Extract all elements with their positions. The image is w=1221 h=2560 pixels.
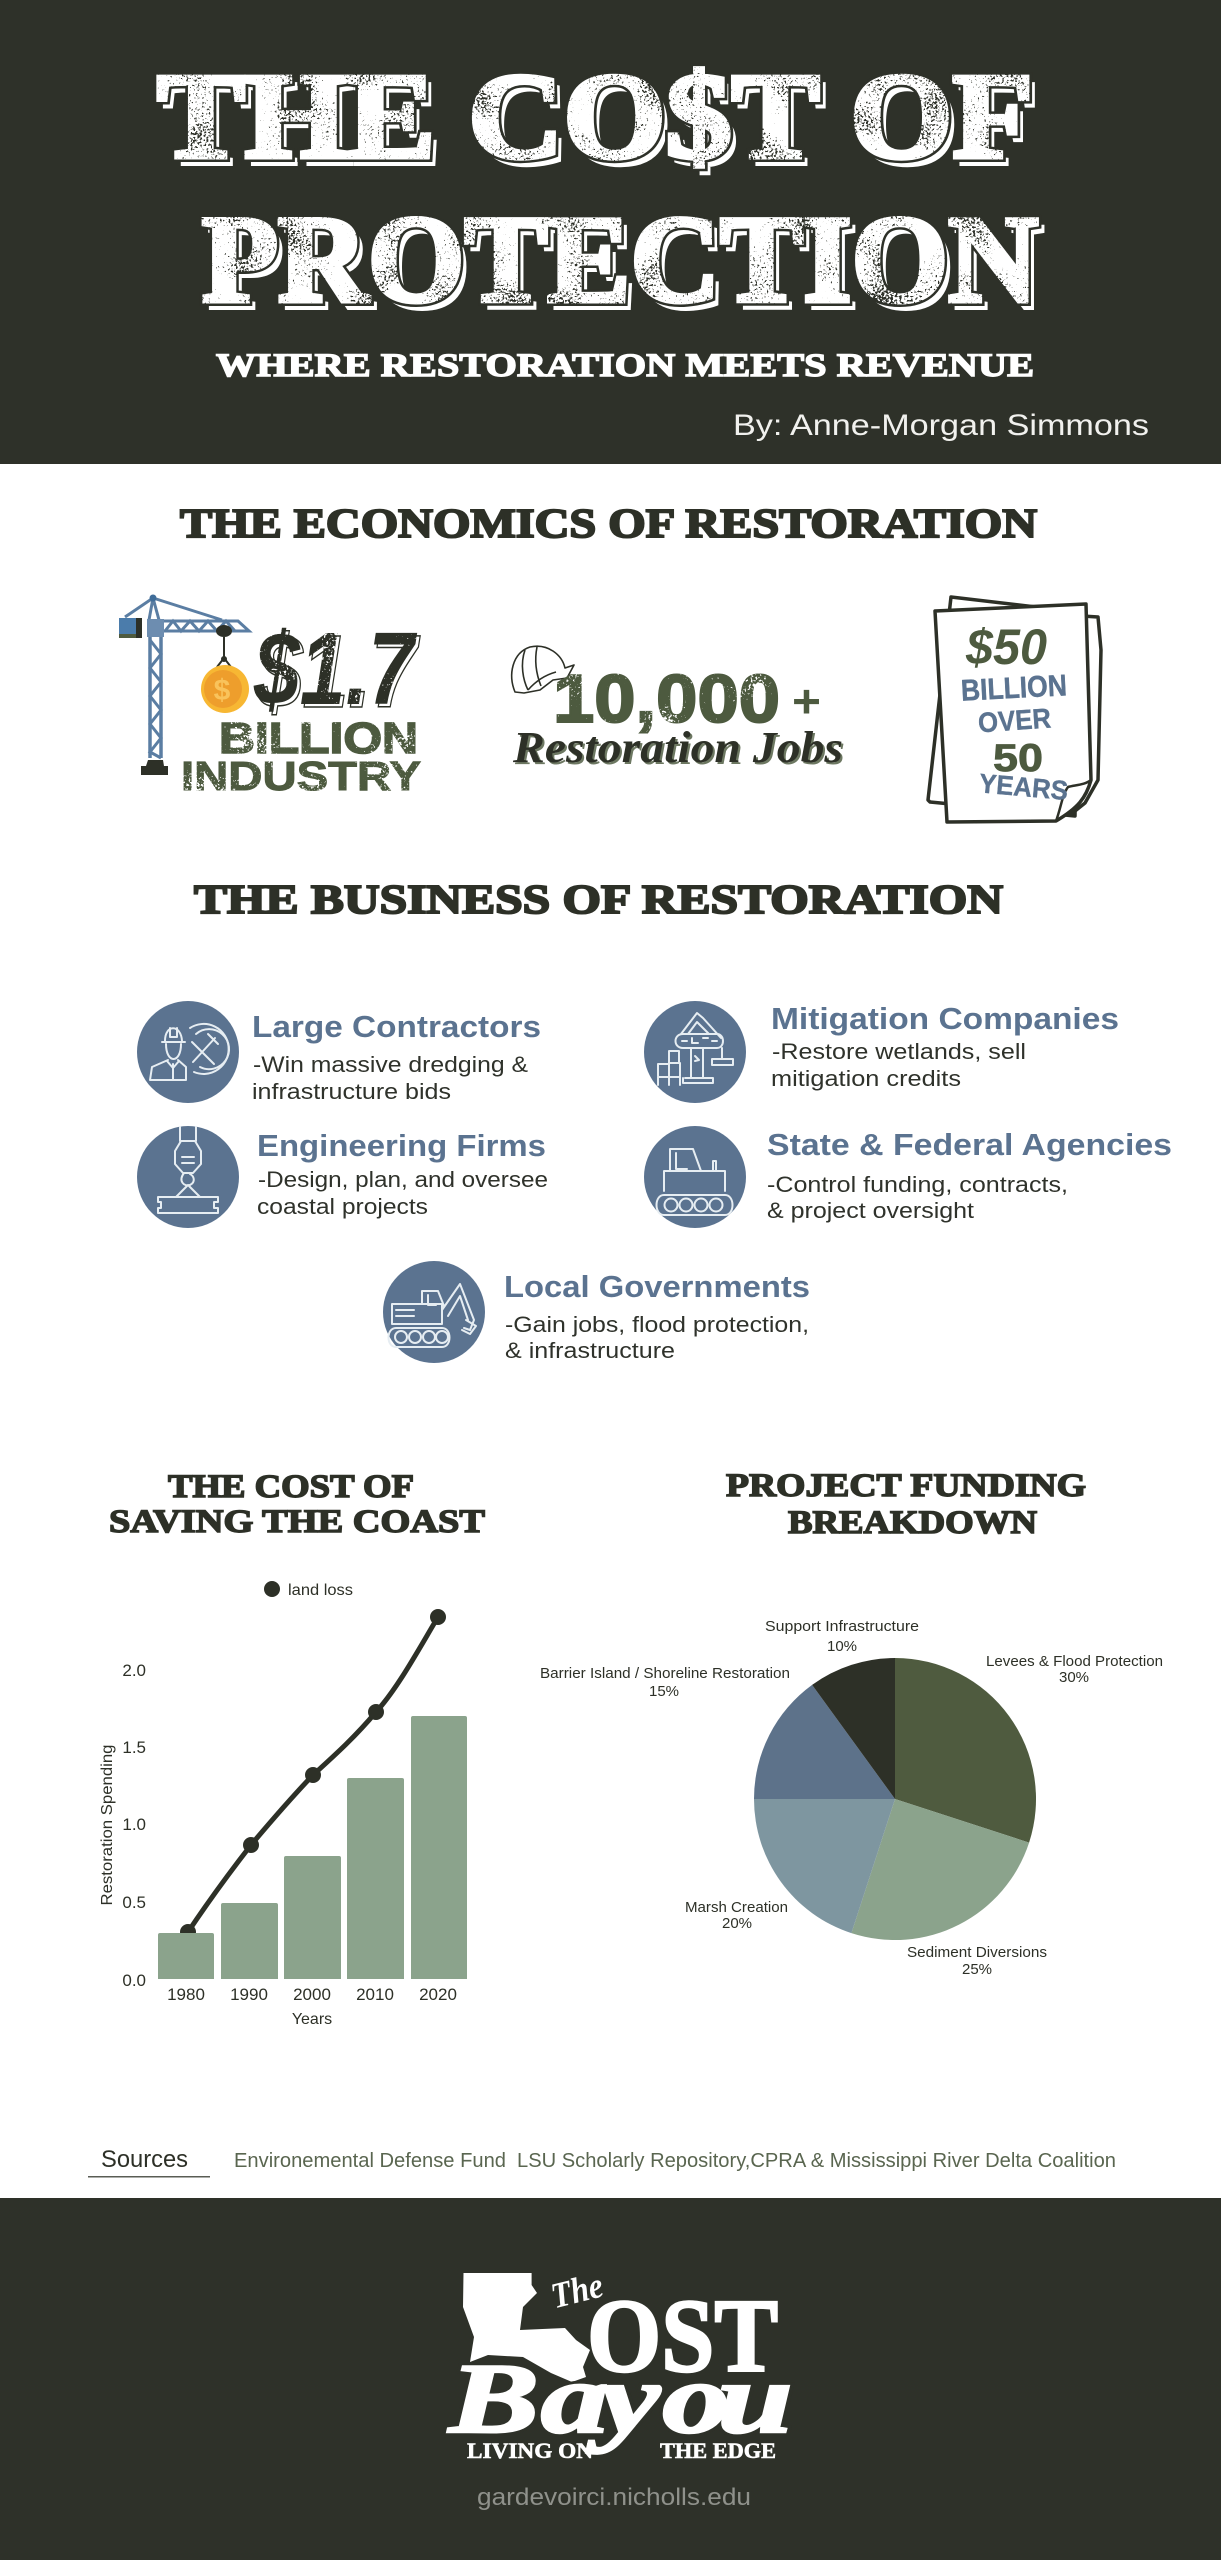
x axis: Years — [292, 2011, 332, 2028]
description — [257, 1167, 548, 1219]
slice: barrier island — [754, 1685, 895, 1799]
title: PROTECTION — [202, 191, 1038, 328]
legend — [264, 1581, 353, 1599]
description: -Restore wetlands, sell — [772, 1039, 1026, 1064]
description: & project oversight — [767, 1198, 974, 1223]
bars: restoration spending — [158, 1716, 467, 1979]
logo: the lost bayou: OST — [587, 2277, 778, 2394]
stat: 10,000+ restoration jobs: + — [792, 675, 821, 727]
label: Restoration Jobs — [514, 725, 845, 774]
x axis: 2020 — [419, 1985, 457, 2004]
heading: State & Federal Agencies — [767, 1127, 1172, 1162]
panel: mitigation companies — [644, 1001, 1119, 1103]
sources: Environemental Defense Fund — [234, 2150, 506, 2172]
heading: project funding breakdown: BREAKDOWN — [788, 1505, 1037, 1541]
y axis: 1.0 — [122, 1815, 146, 1834]
label: over: OVER — [977, 702, 1052, 738]
description — [252, 1052, 528, 1104]
logo: the lost bayou: The — [547, 2265, 607, 2316]
description: -Design, plan, and oversee — [258, 1167, 548, 1192]
pie labels: 15% — [649, 1683, 679, 1700]
heading: Local Governments — [504, 1269, 810, 1304]
description — [767, 1172, 1068, 1223]
panel: state and federal agencies — [644, 1126, 1172, 1228]
y axis: 0.5 — [122, 1893, 146, 1912]
stat: 1.7 billion industry: $1.7 — [253, 611, 418, 726]
slice: levees — [895, 1658, 1036, 1843]
heading: cost of saving the coast: THE COST OF — [168, 1469, 414, 1505]
pie labels — [540, 1618, 1163, 1978]
icon: excavator — [383, 1261, 485, 1363]
stat: 50 billion over 50 years — [928, 597, 1101, 822]
icon: contractor with tools — [137, 1001, 239, 1103]
description — [771, 1039, 1026, 1091]
subtitle: WHERE RESTORATION MEETS REVENUE — [216, 348, 1034, 384]
slice: support infrastructure — [812, 1658, 895, 1799]
description: -Control funding, contracts, — [767, 1172, 1068, 1197]
heading: Engineering Firms — [257, 1128, 546, 1163]
stat: 10,000+ restoration jobs — [512, 646, 845, 774]
icon: hard hat — [512, 646, 574, 693]
heading: economics of restoration: THE ECONOMICS OF RESTORATION — [180, 500, 1037, 546]
value: 10,000 — [553, 661, 780, 737]
icon: louisiana shape — [463, 2273, 590, 2382]
icon: crane with coin: $ — [214, 674, 231, 707]
y axis: 2.0 — [122, 1661, 146, 1680]
heading: project funding breakdown — [726, 1468, 1086, 1541]
description: infrastructure bids — [252, 1079, 451, 1104]
sources — [88, 2146, 1116, 2178]
pie labels: Marsh Creation — [685, 1899, 788, 1916]
heading: business of restoration: THE BUSINESS OF RESTORATION — [194, 876, 1003, 922]
pie labels: 25% — [962, 1961, 992, 1978]
title: THE CO$T OF — [157, 49, 1033, 184]
heading: cost of saving the coast — [109, 1469, 485, 1540]
line series: land loss — [180, 1609, 446, 1940]
legend: land loss — [288, 1582, 353, 1599]
title: THE CO$T OF — [157, 49, 1033, 184]
sources: LSU Scholarly Repository,CPRA & Mississippi River Delta Coalition — [517, 2150, 1116, 2172]
heading: cost of saving the coast: SAVING THE COAST — [109, 1504, 485, 1540]
stat: 1.7 billion industry — [119, 594, 421, 799]
value: $1.7 — [256, 614, 421, 729]
y axis — [99, 1661, 146, 1990]
label: billion: BILLION — [219, 714, 418, 763]
logo: the lost bayou — [447, 2265, 793, 2463]
description: -Win massive dredging & — [253, 1052, 528, 1077]
heading: Large Contractors — [252, 1009, 541, 1044]
pie labels: 30% — [1059, 1669, 1089, 1686]
description: coastal projects — [257, 1194, 428, 1219]
label: billion: BILLION — [960, 669, 1068, 708]
title: PROTECTION — [202, 191, 1038, 328]
logo: the lost bayou: Bayou — [447, 2343, 793, 2454]
description — [505, 1312, 809, 1363]
chart: restoration spending and land loss — [99, 1581, 467, 2028]
title: THE CO$T OF — [163, 56, 1039, 191]
panel: header — [0, 0, 1221, 464]
stat: 10,000+ restoration jobs: Restoration Jobs — [512, 723, 843, 772]
pie labels: Levees & Flood Protection — [986, 1653, 1163, 1670]
description: mitigation credits — [771, 1066, 961, 1091]
icon: crane with coin — [119, 594, 249, 775]
value: $50: $50 — [965, 619, 1047, 675]
x axis — [167, 1985, 457, 2028]
logo: the lost bayou: THE EDGE — [660, 2438, 776, 2463]
label: years: YEARS — [978, 768, 1069, 806]
panel: local governments — [383, 1261, 810, 1363]
pie labels: Barrier Island / Shoreline Restoration — [540, 1665, 790, 1682]
icon: port crane and cargo — [644, 1001, 746, 1103]
panel: footer — [0, 2198, 1221, 2560]
panel: large contractors — [137, 1001, 541, 1104]
slice: sediment diversions — [851, 1799, 1029, 1940]
icon: bulldozer — [644, 1126, 746, 1228]
panel: engineering firms — [137, 1126, 548, 1228]
sources: Sources — [101, 2146, 188, 2173]
title — [157, 49, 1044, 335]
pie labels: 10% — [827, 1638, 857, 1655]
heading: project funding breakdown: PROJECT FUNDING — [726, 1468, 1086, 1504]
y axis: Restoration Spending — [99, 1745, 116, 1906]
y axis: 0.0 — [122, 1971, 146, 1990]
description: & infrastructure — [505, 1338, 675, 1363]
chart: funding pie — [540, 1618, 1163, 1978]
logo: the lost bayou: LIVING ON — [467, 2438, 593, 2463]
x axis: 1990 — [230, 1985, 268, 2004]
heading: Mitigation Companies — [771, 1001, 1119, 1036]
title: PROTECTION — [208, 198, 1044, 335]
icon: crane hook and beam — [137, 1126, 239, 1228]
byline: By: Anne-Morgan Simmons — [733, 409, 1149, 442]
description: -Gain jobs, flood protection, — [505, 1312, 809, 1337]
y axis: 1.5 — [122, 1738, 146, 1757]
logo: the lost bayou: Bayou — [447, 2343, 793, 2454]
pie labels: Support Infrastructure — [765, 1618, 919, 1635]
value: 50: 50 — [993, 737, 1043, 780]
x axis: 2010 — [356, 1985, 394, 2004]
x axis: 2000 — [293, 1985, 331, 2004]
icon: paper stack — [928, 597, 1101, 822]
pie labels: Sediment Diversions — [907, 1944, 1047, 1961]
slice: marsh creation — [754, 1799, 895, 1933]
website: gardevoirci.nicholls.edu — [477, 2484, 751, 2511]
x axis: 1980 — [167, 1985, 205, 2004]
pie labels: 20% — [722, 1915, 752, 1932]
label: industry: INDUSTRY — [181, 753, 421, 799]
